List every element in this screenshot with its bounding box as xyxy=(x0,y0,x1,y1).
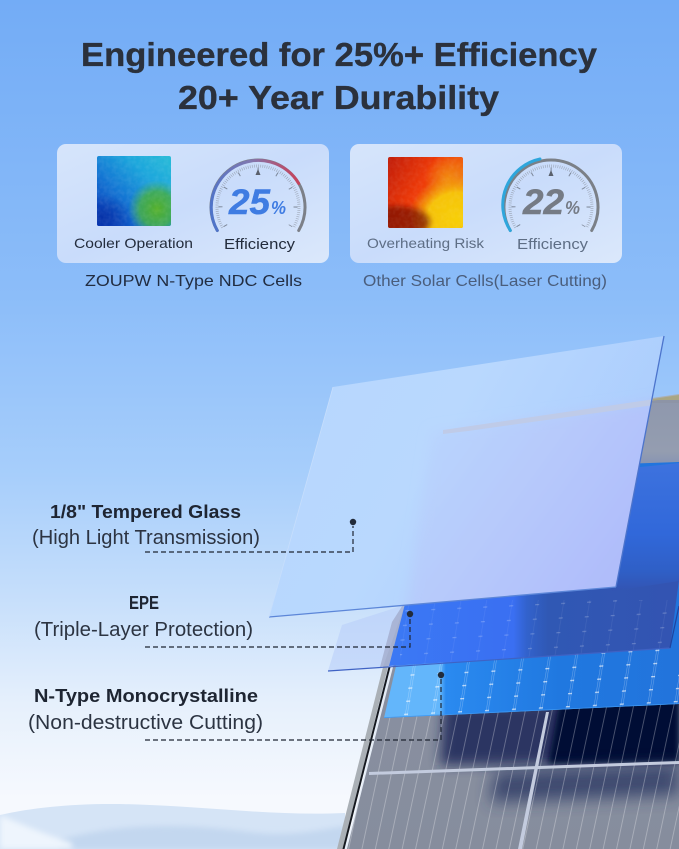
callout: tempered glass: 1/8" Tempered Glass xyxy=(50,502,241,522)
EPE over cells xyxy=(389,580,679,666)
title xyxy=(81,36,598,116)
callout: tempered glass: (High Light Transmission) xyxy=(32,527,260,549)
label: overheating risk: Overheating Risk xyxy=(367,235,485,251)
panel dividers xyxy=(369,712,679,849)
title: 20+ Year Durability xyxy=(178,79,500,116)
gauge: 25% efficiency xyxy=(211,160,305,230)
callout: EPE xyxy=(34,593,413,647)
gauge: 25% efficiency: % xyxy=(271,198,286,218)
gauge: 22% efficiency xyxy=(503,159,598,230)
cell string lines xyxy=(340,700,679,849)
label: efficiency: Efficiency xyxy=(517,236,589,253)
label: cooler operation: Cooler Operation xyxy=(74,235,193,251)
layer: tempered glass xyxy=(269,336,679,620)
callout: N-type monocrystalline: (Non-destructive Cutting) xyxy=(28,712,263,734)
callout: EPE: (Triple-Layer Protection) xyxy=(34,619,253,641)
dark shadow of upper layers xyxy=(440,695,679,802)
layer: N-Type monocrystalline cells xyxy=(380,460,679,720)
callout: N-type monocrystalline: N-Type Monocrystalline xyxy=(34,686,258,706)
callout: tempered glass xyxy=(32,502,356,552)
callout: EPE: EPE xyxy=(129,593,159,613)
gauge: 22% efficiency: % xyxy=(565,198,580,218)
frame seen through EPE xyxy=(380,600,406,667)
solar panel body xyxy=(340,400,679,849)
label: efficiency: Efficiency xyxy=(224,236,296,253)
gauge: 22% efficiency: 22 xyxy=(522,183,565,222)
panel: ZOUPW N-Type NDC cells card xyxy=(57,144,329,263)
thermal image: overheating cell xyxy=(388,157,463,228)
caption: ZOUPW cells: ZOUPW N-Type NDC Cells xyxy=(85,273,302,290)
layer: EPE xyxy=(328,580,679,671)
thermal image: cool cell xyxy=(97,156,171,226)
panel: other solar cells card xyxy=(350,144,622,263)
solar panel frame xyxy=(337,394,679,849)
EPE right edge xyxy=(670,606,679,648)
callout: N-type monocrystalline xyxy=(28,672,444,740)
blue cells visible right of glass xyxy=(612,463,679,591)
gauge: 25% efficiency: 25 xyxy=(228,183,271,222)
title: Engineered for 25%+ Efficiency xyxy=(81,36,598,73)
distant hills xyxy=(0,804,345,849)
caption: other solar cells: Other Solar Cells(Laser Cutting) xyxy=(363,273,607,290)
